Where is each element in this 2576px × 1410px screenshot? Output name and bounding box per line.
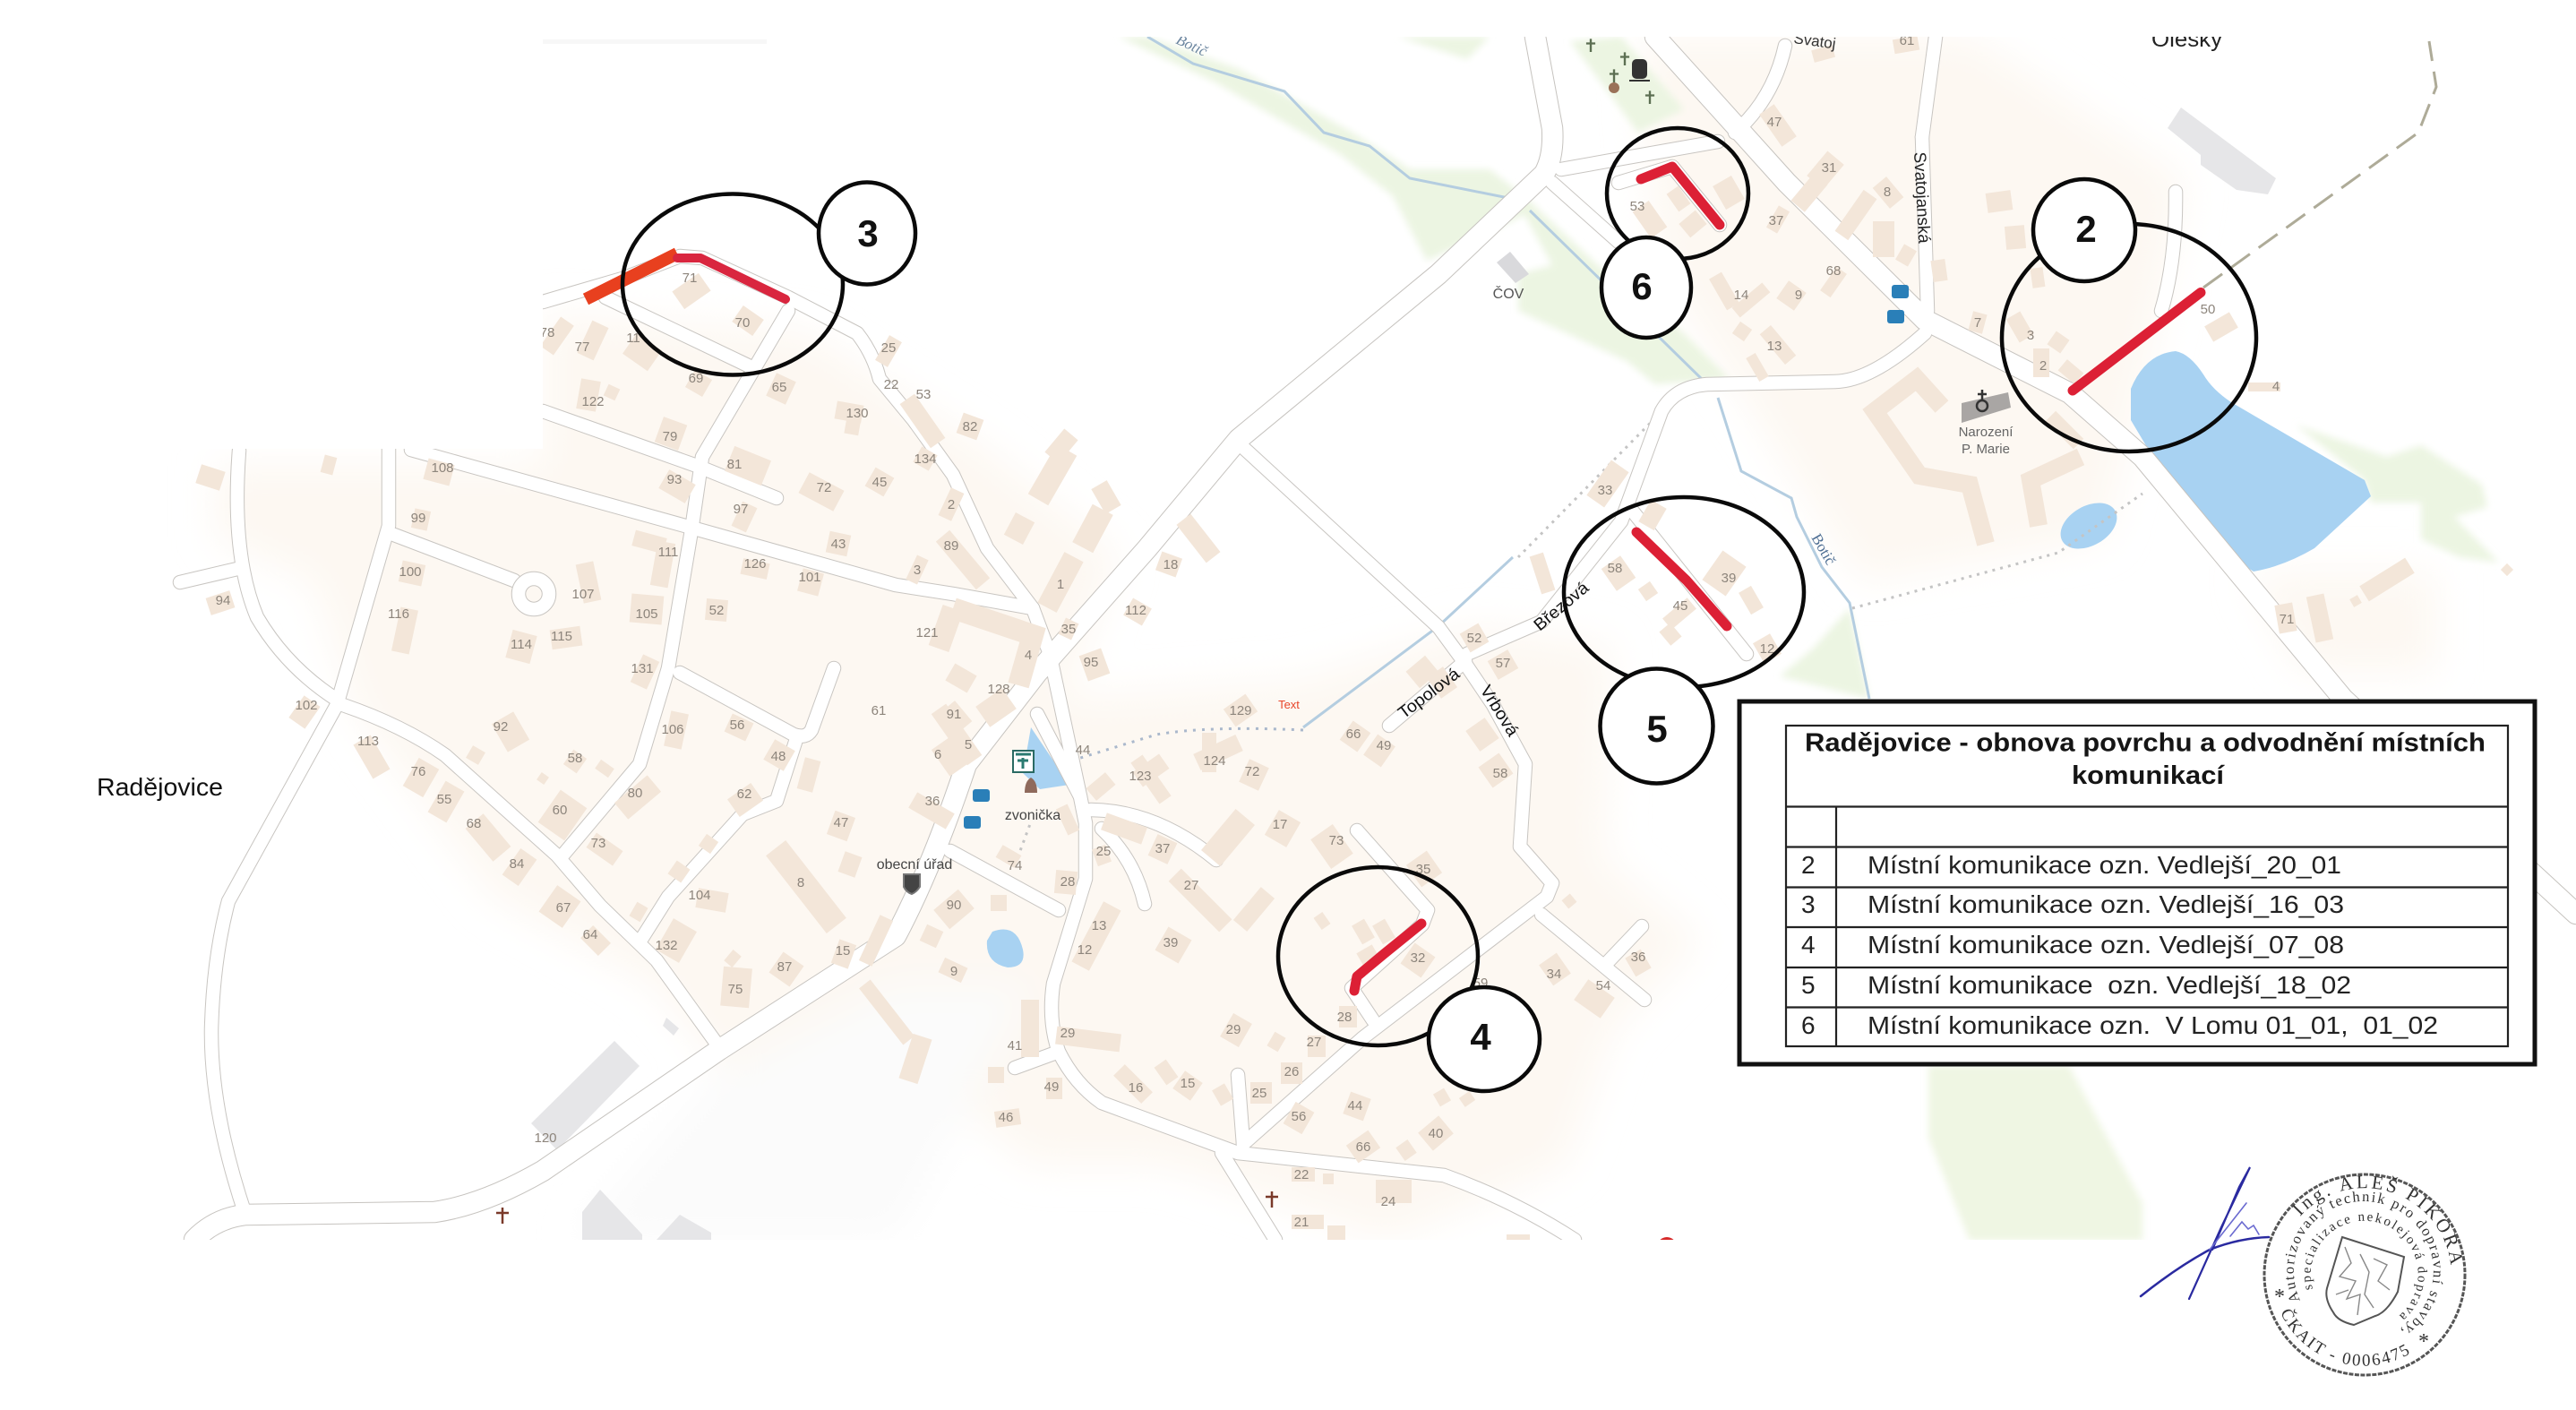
rivers and paths [1015, 37, 2436, 865]
house numbers: 97 [734, 502, 748, 517]
stamp [2263, 1174, 2467, 1376]
table rows: Místní komunikace ozn. Vedlejší_16_03 [1868, 890, 2344, 918]
house numbers: 62 [737, 787, 751, 802]
house numbers: 129 [1229, 703, 1252, 718]
house numbers: 105 [635, 606, 658, 622]
house numbers: 13 [1092, 918, 1106, 933]
icon: town hall shield [904, 874, 920, 894]
house numbers: 37 [1155, 841, 1170, 856]
house numbers: 35 [1416, 862, 1430, 877]
icon: church [1977, 390, 1988, 411]
icon: outdoor gym [1013, 751, 1034, 772]
house numbers: 120 [534, 1131, 557, 1146]
house numbers: 132 [655, 938, 678, 953]
house numbers: 106 [661, 722, 684, 737]
village background tint [215, 37, 2436, 1240]
house numbers: 92 [494, 719, 508, 735]
badge 2 [2033, 179, 2135, 281]
house numbers: 72 [817, 480, 831, 495]
table grid [1786, 726, 2508, 1046]
house numbers: 6 [934, 747, 941, 762]
house numbers: 39 [1163, 935, 1178, 950]
icon: bell [1025, 778, 1037, 793]
house numbers: 69 [689, 371, 703, 386]
house numbers: 93 [667, 472, 682, 487]
table rows: Místní komunikace ozn. Vedlejší_18_02 [1868, 971, 2351, 999]
house numbers: 134 [914, 451, 937, 467]
house numbers: 22 [884, 377, 898, 392]
house numbers: 82 [963, 419, 977, 434]
red dot at map edge [1661, 1237, 1673, 1240]
house numbers: 68 [467, 816, 481, 831]
house numbers: 8 [797, 875, 804, 890]
house numbers: 44 [1076, 743, 1090, 758]
house numbers: 36 [1631, 950, 1645, 965]
place labels: Text [1278, 698, 1300, 711]
house numbers: 11 [626, 331, 640, 346]
house numbers: 14 [1734, 288, 1748, 303]
house numbers: 99 [411, 511, 425, 526]
house numbers: 31 [1822, 160, 1836, 176]
place labels: Svatojanská [1910, 151, 1933, 245]
table title [1805, 729, 2486, 790]
house numbers: 18 [1163, 557, 1178, 572]
house numbers: 70 [735, 315, 750, 331]
house numbers: 60 [553, 803, 567, 818]
house numbers: 94 [216, 593, 230, 608]
house numbers: 54 [1596, 978, 1610, 993]
house numbers: 74 [1008, 858, 1022, 873]
house numbers: 71 [683, 271, 697, 286]
segment 6 [1641, 167, 1720, 225]
place labels: Botič [1173, 30, 1211, 60]
table rows: 4 [1801, 931, 1816, 959]
house numbers: 107 [571, 587, 595, 602]
house numbers: 9 [950, 964, 957, 979]
house numbers: 115 [551, 629, 572, 644]
circle 3 [623, 193, 843, 374]
house numbers: 55 [437, 792, 451, 807]
house numbers: 56 [730, 718, 744, 733]
house numbers: 49 [1377, 738, 1391, 753]
place labels: zvonička [1005, 808, 1060, 823]
house numbers: 25 [1096, 844, 1111, 859]
house numbers: 21 [1294, 1215, 1309, 1230]
house numbers: 128 [987, 682, 1010, 697]
house numbers: 36 [925, 794, 940, 809]
house numbers: 3 [2027, 328, 2034, 343]
segment 2 [2073, 292, 2201, 391]
table rows: 6 [1801, 1011, 1816, 1039]
house numbers: 68 [1826, 263, 1841, 279]
house numbers: 72 [1245, 764, 1259, 779]
house numbers: 58 [568, 751, 582, 766]
house numbers: 66 [1356, 1139, 1370, 1155]
table rows [1801, 851, 2438, 1039]
table rows: 2 [1801, 851, 1816, 879]
house numbers: 64 [583, 927, 597, 942]
house numbers: 37 [1769, 213, 1783, 228]
house numbers: 27 [1184, 878, 1198, 893]
stamp: Ing. ALEŠ PIKORA [2291, 1175, 2462, 1265]
legend frame [1739, 701, 2535, 1064]
buildings [195, 36, 2513, 1245]
house numbers: 108 [431, 460, 454, 476]
house numbers: 1 [1057, 577, 1064, 592]
table rows: Místní komunikace ozn. V Lomu 01_01, 01_02 [1868, 1011, 2438, 1039]
house numbers: 56 [1292, 1109, 1306, 1124]
house numbers: 84 [510, 856, 524, 872]
area circles [623, 128, 2256, 1045]
house numbers: 35 [1061, 622, 1076, 637]
house numbers: 39 [1722, 571, 1736, 586]
house numbers: 13 [1767, 339, 1782, 354]
house numbers: 15 [1181, 1076, 1195, 1091]
house numbers: 81 [727, 457, 742, 472]
house numbers: 111 [658, 545, 678, 560]
place labels: ČOV [1493, 285, 1524, 302]
house numbers: 17 [1273, 817, 1287, 832]
house numbers: 122 [581, 394, 605, 409]
house numbers: 15 [836, 943, 850, 959]
place labels: P. Marie [1962, 442, 2010, 457]
table rows: 5 [1801, 971, 1816, 999]
table rows: Místní komunikace ozn. Vedlejší_20_01 [1868, 851, 2341, 879]
house numbers: 52 [709, 603, 724, 618]
place labels [877, 27, 2223, 873]
house numbers: 59 [1473, 976, 1488, 991]
house numbers: 16 [1129, 1080, 1143, 1096]
house numbers: 104 [688, 888, 711, 903]
house numbers: 116 [388, 606, 409, 622]
house numbers: 78 [540, 325, 554, 340]
badge 4: 4 [1470, 1016, 1491, 1058]
house numbers: 25 [881, 340, 896, 356]
table rows: Místní komunikace ozn. Vedlejší_07_08 [1868, 931, 2344, 959]
circle 4 [1278, 867, 1478, 1045]
badge 6: 6 [1631, 265, 1653, 307]
house numbers: 130 [846, 406, 869, 421]
badge 3 [819, 183, 915, 285]
greenery [1119, 37, 2499, 1241]
signature [2141, 1167, 2269, 1299]
house numbers: 8 [1884, 185, 1891, 200]
house numbers: 114 [511, 637, 532, 652]
badge 6 [1601, 237, 1691, 338]
house numbers: 73 [591, 836, 605, 851]
house numbers: 46 [999, 1110, 1013, 1125]
house numbers: 26 [1284, 1064, 1299, 1079]
house numbers: 7 [1974, 315, 1981, 331]
legend table [1739, 701, 2535, 1064]
place labels: Topolová [1395, 665, 1464, 723]
house numbers: 89 [944, 538, 958, 554]
house numbers: 123 [1129, 769, 1152, 784]
house numbers: 131 [631, 661, 654, 676]
icon: bus stops [964, 285, 1909, 829]
grey buildings [531, 107, 2276, 1240]
icon: cemetery symbols: ✝ [1643, 89, 1657, 108]
house numbers: 67 [556, 900, 571, 916]
house numbers: 66 [1346, 726, 1361, 742]
place labels: Olešky [2151, 27, 2223, 52]
house numbers: 28 [1337, 1010, 1352, 1025]
house numbers: 2 [2039, 358, 2047, 374]
house numbers: 45 [872, 475, 887, 490]
icon: cemetery symbols: ✝ [1607, 67, 1621, 87]
house numbers: 71 [2280, 612, 2294, 627]
house numbers: 4 [2272, 379, 2280, 394]
badge 2: 2 [2075, 208, 2097, 250]
icon: roadside crosses [496, 1191, 1278, 1224]
roads [180, 37, 2576, 1240]
badge 5 [1600, 668, 1713, 783]
place labels: Vrbová [1476, 683, 1522, 740]
house numbers: 40 [1429, 1126, 1443, 1141]
stamp: * [2418, 1330, 2429, 1354]
house numbers: 75 [728, 982, 743, 997]
house numbers: 58 [1608, 561, 1622, 576]
stamp: * [2274, 1285, 2285, 1309]
stamp shield [2326, 1237, 2404, 1325]
house numbers: 73 [1329, 833, 1344, 848]
house numbers: 29 [1226, 1022, 1241, 1037]
house numbers: 76 [411, 764, 425, 779]
segment 5 [1636, 532, 1727, 626]
house numbers: 50 [2201, 302, 2215, 317]
circle 6 [1607, 128, 1748, 259]
house numbers: 77 [575, 340, 589, 355]
house numbers: 126 [743, 556, 767, 572]
house numbers: 27 [1307, 1035, 1321, 1050]
house numbers: 3 [914, 563, 921, 578]
house numbers: 25 [1252, 1086, 1267, 1101]
house numbers: 22 [1294, 1167, 1309, 1182]
house numbers: 47 [1767, 115, 1782, 130]
house numbers: 47 [834, 815, 848, 830]
house numbers: 2 [948, 497, 955, 512]
stamp: Autorizovaný technik pro dopravní stavby, [2286, 1191, 2443, 1333]
house numbers: 53 [916, 387, 931, 402]
place labels: obecní úřad [877, 857, 952, 873]
ponds [987, 351, 2371, 967]
number badges [819, 179, 2135, 1091]
badge 3: 3 [857, 212, 879, 254]
place labels: Narození [1959, 425, 2014, 440]
house numbers: 28 [1060, 874, 1075, 890]
house numbers: 101 [798, 570, 821, 585]
icon: cemetery symbols [1585, 39, 1655, 104]
house numbers: 34 [1547, 967, 1561, 982]
house numbers: 90 [947, 898, 961, 913]
house numbers: 12 [1078, 942, 1092, 958]
house numbers: 32 [1411, 950, 1425, 966]
icon: cemetery symbols: ✝ [1618, 50, 1632, 70]
house numbers: 95 [1084, 655, 1098, 670]
house numbers: 52 [1467, 631, 1481, 646]
house numbers: 12 [1760, 641, 1774, 657]
house numbers: 102 [295, 698, 318, 713]
house numbers: 112 [1125, 603, 1146, 618]
place labels: Svatoj [1792, 30, 1837, 53]
village name: Radějovice [97, 773, 223, 801]
house numbers: 49 [1044, 1079, 1059, 1095]
circle 2 [2002, 224, 2256, 451]
circle 5 [1564, 497, 1804, 687]
house numbers: 29 [1060, 1026, 1075, 1041]
house numbers: 80 [628, 786, 642, 801]
house numbers: 24 [1381, 1194, 1395, 1209]
place labels: Botič [1808, 530, 1840, 568]
stamp: ČKAIT - 0006475 [2282, 1308, 2409, 1366]
icon: cemetery symbols: ✝ [1584, 37, 1598, 56]
house numbers: 33 [1598, 483, 1612, 498]
house numbers: 58 [1493, 766, 1507, 781]
stamp: specializace nekolejová doprava [2304, 1213, 2427, 1319]
house numbers: 61 [872, 703, 886, 718]
house numbers: 48 [771, 749, 786, 764]
house numbers: 87 [777, 959, 792, 975]
house numbers: 121 [915, 625, 939, 641]
house numbers: 124 [1203, 753, 1226, 769]
house numbers: 9 [1795, 288, 1802, 303]
house numbers: 5 [965, 737, 972, 752]
table title: Radějovice - obnova povrchu a odvodnění místních [1805, 729, 2486, 758]
house numbers: 57 [1496, 656, 1510, 671]
table title: komunikací [2072, 761, 2225, 790]
house numbers: 45 [1673, 598, 1687, 614]
faint scan artefact [543, 39, 767, 44]
segment 3 red [677, 258, 786, 299]
house numbers: 53 [1630, 199, 1644, 214]
house numbers: 61 [1900, 33, 1914, 48]
house numbers: 44 [1348, 1098, 1362, 1113]
place labels: Březová [1531, 579, 1593, 635]
house numbers: 43 [831, 537, 846, 552]
house numbers: 41 [1008, 1038, 1022, 1053]
table rows: 3 [1801, 890, 1816, 918]
badge 4 [1429, 987, 1540, 1091]
house numbers: 91 [947, 707, 961, 722]
segment 4 [1354, 924, 1421, 991]
house numbers: 100 [399, 564, 422, 580]
badge 5: 5 [1646, 708, 1668, 750]
highlighted road segments [586, 167, 2201, 991]
house numbers [216, 33, 2294, 1230]
house numbers: 113 [357, 734, 379, 749]
house numbers: 79 [663, 429, 677, 444]
house numbers: 65 [772, 380, 786, 395]
segment 3 orange [586, 254, 677, 299]
house numbers: 4 [1025, 648, 1032, 663]
